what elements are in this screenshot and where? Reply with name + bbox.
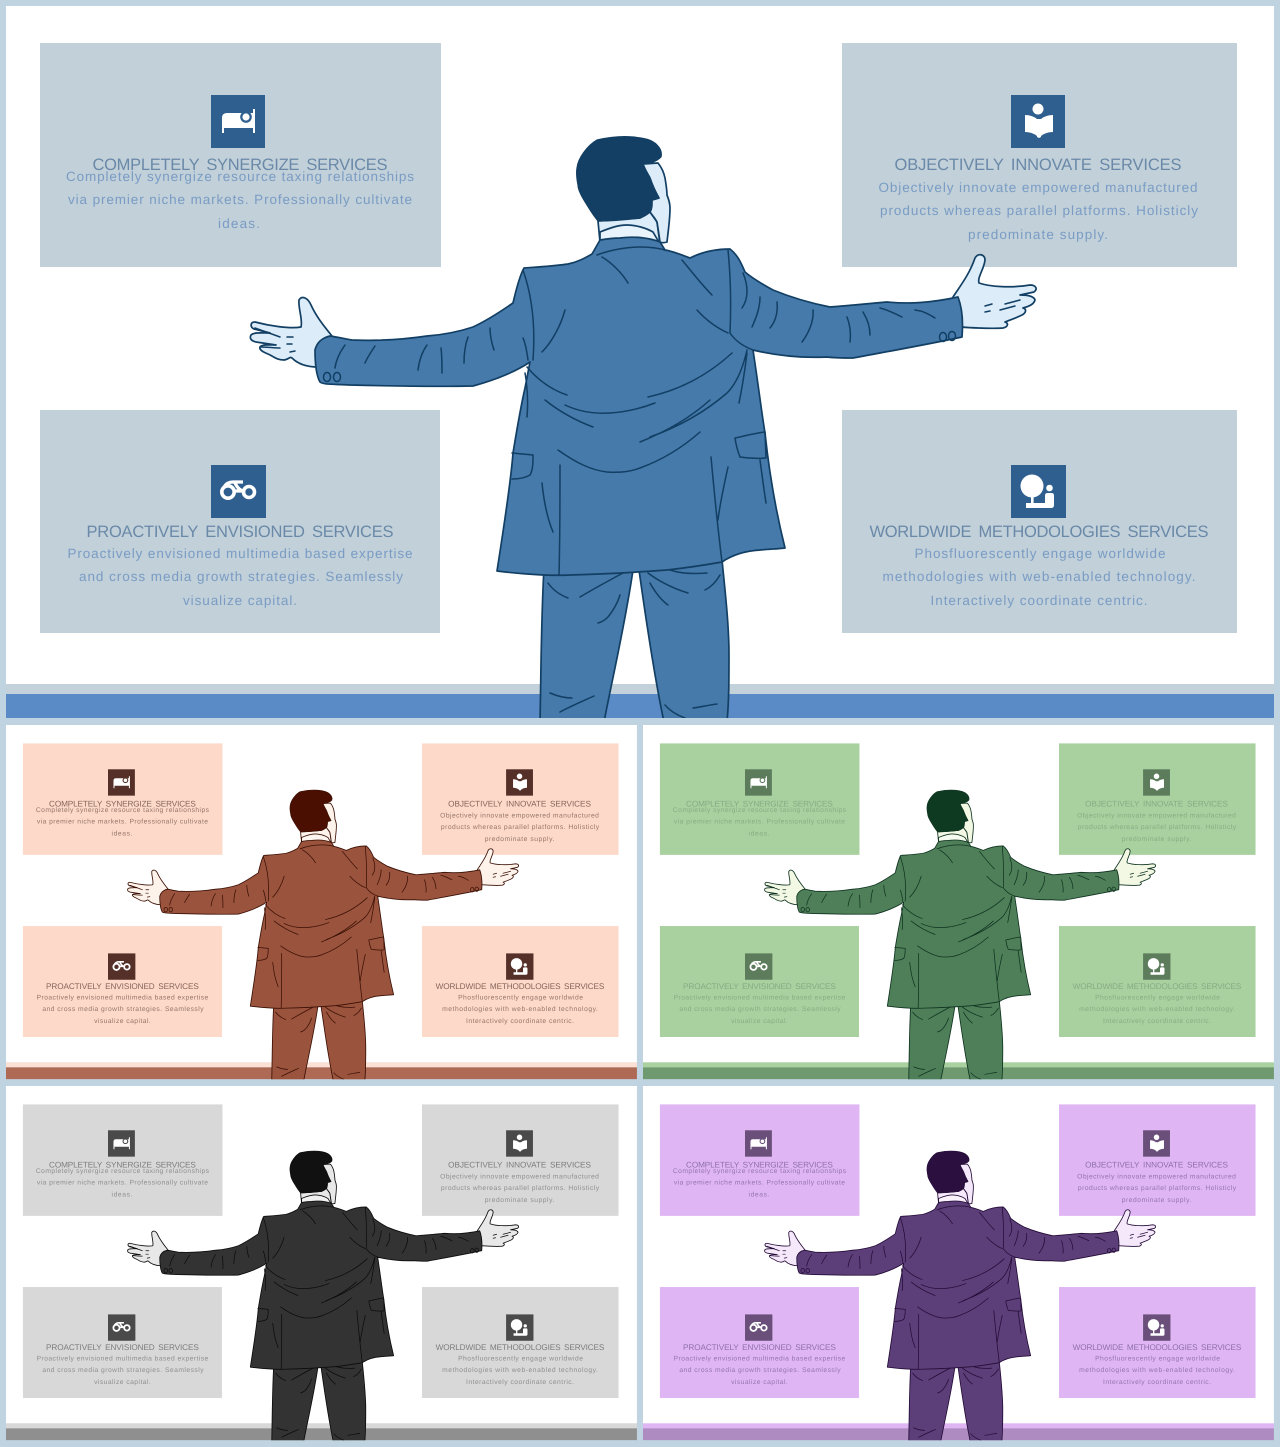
card: objectively innovate services: Objectively innovate empowered manufactured [1077, 1173, 1236, 1180]
card: objectively innovate services: Objectively innovate empowered manufactured [1077, 812, 1236, 819]
card: objectively innovate services: OBJECTIVELY INNOVATE SERVICES [1085, 1161, 1228, 1170]
card: worldwide methodologies services: Phosfluorescently engage worldwide [914, 546, 1166, 561]
card: objectively innovate services: products whereas parallel platforms. Holisticly [1078, 823, 1236, 830]
card: objectively innovate services: predominate supply. [1122, 1196, 1191, 1203]
card: worldwide methodologies services [422, 1287, 619, 1398]
figure: businessman in green suit [765, 790, 1156, 1081]
panel: purple variant slide [643, 1086, 1274, 1442]
card: completely synergize services: via premier niche markets. Professionally cultivate [674, 818, 845, 825]
card: completely synergize services: ideas. [748, 829, 769, 837]
card: objectively innovate services: products whereas parallel platforms. Holisticly [880, 203, 1198, 218]
card: worldwide methodologies services: methodologies with web-enabled technology. [882, 569, 1196, 584]
card: objectively innovate services [1059, 1104, 1256, 1216]
card: completely synergize services: COMPLETELY SYNERGIZE SERVICES [686, 800, 833, 809]
card: objectively innovate services: OBJECTIVELY INNOVATE SERVICES [1085, 800, 1228, 809]
card: completely synergize services: via premier niche markets. Professionally cultivate [674, 1179, 845, 1186]
card: completely synergize services [23, 743, 222, 855]
card: objectively innovate services [422, 1104, 619, 1216]
card: objectively innovate services: predominate supply. [485, 1196, 554, 1203]
card: objectively innovate services: Objectively innovate empowered manufactured [440, 812, 599, 819]
card: proactively envisioned services: visualize capital. [94, 1017, 151, 1025]
card: worldwide methodologies services: WORLDWIDE METHODOLOGIES SERVICES [1073, 982, 1241, 991]
card: proactively envisioned services [660, 1287, 859, 1398]
card: objectively innovate services: Objectively innovate empowered manufactured [878, 180, 1198, 195]
card: objectively innovate services: OBJECTIVELY INNOVATE SERVICES [448, 1161, 591, 1170]
card: proactively envisioned services: and cross media growth strategies. Seamlessly [679, 1005, 841, 1013]
card: proactively envisioned services: Proactively envisioned multimedia based expertise [674, 994, 845, 1001]
card: completely synergize services: COMPLETELY SYNERGIZE SERVICES [49, 800, 196, 809]
card: objectively innovate services: products whereas parallel platforms. Holisticly [441, 1184, 599, 1191]
card: worldwide methodologies services: methodologies with web-enabled technology. [442, 1366, 598, 1374]
card: completely synergize services [40, 43, 441, 267]
card: completely synergize services: Completely synergize resource taxing relationships [66, 169, 414, 184]
card: proactively envisioned services: PROACTIVELY ENVISIONED SERVICES [683, 982, 836, 991]
card: completely synergize services: Completely synergize resource taxing relationships [673, 1167, 846, 1175]
card: proactively envisioned services [23, 926, 222, 1037]
card: proactively envisioned services: and cross media growth strategies. Seamlessly [42, 1005, 204, 1013]
card: worldwide methodologies services: WORLDWIDE METHODOLOGIES SERVICES [436, 1343, 604, 1352]
figure: businessman in black suit [128, 1151, 519, 1442]
card: worldwide methodologies services: Phosfluorescently engage worldwide [458, 1355, 583, 1362]
card: proactively envisioned services: Proactively envisioned multimedia based expertise [37, 1355, 208, 1362]
card: proactively envisioned services: visualize capital. [94, 1378, 151, 1386]
card: proactively envisioned services: PROACTIVELY ENVISIONED SERVICES [46, 1343, 199, 1352]
card: proactively envisioned services [660, 926, 859, 1037]
card: completely synergize services: via premier niche markets. Professionally cultivate [37, 1179, 208, 1186]
card: completely synergize services: Completely synergize resource taxing relationships [673, 806, 846, 814]
card: objectively innovate services: OBJECTIVELY INNOVATE SERVICES [894, 156, 1182, 174]
card: objectively innovate services: products whereas parallel platforms. Holisticly [441, 823, 599, 830]
panel: blue main slide [6, 6, 1274, 722]
card: completely synergize services: COMPLETELY SYNERGIZE SERVICES [686, 1161, 833, 1170]
card: worldwide methodologies services: Interactively coordinate centric. [466, 1017, 574, 1025]
card: proactively envisioned services: and cross media growth strategies. Seamlessly [679, 1366, 841, 1374]
card: worldwide methodologies services: Interactively coordinate centric. [1103, 1378, 1211, 1386]
card: completely synergize services: COMPLETELY SYNERGIZE SERVICES [49, 1161, 196, 1170]
panel: gray variant slide [6, 1086, 637, 1442]
card: proactively envisioned services: Proactively envisioned multimedia based expertise [37, 994, 208, 1001]
card: objectively innovate services: OBJECTIVELY INNOVATE SERVICES [448, 800, 591, 809]
card: worldwide methodologies services: Interactively coordinate centric. [466, 1378, 574, 1386]
card: worldwide methodologies services: Interactively coordinate centric. [1103, 1017, 1211, 1025]
card: completely synergize services: via premier niche markets. Professionally cultivate [68, 192, 412, 207]
card: objectively innovate services: Objectively innovate empowered manufactured [440, 1173, 599, 1180]
card: completely synergize services: ideas. [218, 216, 260, 231]
card: objectively innovate services [1059, 743, 1256, 855]
panel: red variant slide [6, 725, 637, 1081]
card: worldwide methodologies services: Phosfluorescently engage worldwide [1095, 1355, 1220, 1362]
card: completely synergize services [23, 1104, 222, 1216]
figure: businessman with open arms [250, 137, 1036, 722]
card: proactively envisioned services: Proactively envisioned multimedia based expertise [674, 1355, 845, 1362]
card: worldwide methodologies services: WORLDWIDE METHODOLOGIES SERVICES [870, 523, 1208, 541]
card: worldwide methodologies services [1059, 1287, 1256, 1398]
card: objectively innovate services: predominate supply. [1122, 835, 1191, 842]
card: worldwide methodologies services: Phosfluorescently engage worldwide [1095, 994, 1220, 1001]
card: proactively envisioned services: PROACTIVELY ENVISIONED SERVICES [46, 982, 199, 991]
card: worldwide methodologies services: Phosfluorescently engage worldwide [458, 994, 583, 1001]
card: proactively envisioned services [23, 1287, 222, 1398]
panel: green variant slide [643, 725, 1274, 1081]
card: proactively envisioned services [40, 410, 440, 633]
card: worldwide methodologies services [842, 410, 1237, 633]
card: completely synergize services: Completely synergize resource taxing relationships [36, 806, 209, 814]
card: objectively innovate services [842, 43, 1237, 267]
card: proactively envisioned services: and cross media growth strategies. Seamlessly [79, 569, 403, 584]
card: objectively innovate services: predominate supply. [485, 835, 554, 842]
card: worldwide methodologies services: methodologies with web-enabled technology. [1079, 1366, 1235, 1374]
card: worldwide methodologies services: WORLDWIDE METHODOLOGIES SERVICES [1073, 1343, 1241, 1352]
card: proactively envisioned services: PROACTIVELY ENVISIONED SERVICES [683, 1343, 836, 1352]
card: proactively envisioned services: visualize capital. [183, 593, 297, 608]
figure: businessman in purple suit [765, 1151, 1156, 1442]
card: objectively innovate services [422, 743, 619, 855]
card: worldwide methodologies services: methodologies with web-enabled technology. [442, 1005, 598, 1013]
card: worldwide methodologies services: Interactively coordinate centric. [930, 593, 1148, 608]
card: proactively envisioned services: visualize capital. [731, 1378, 788, 1386]
card: worldwide methodologies services [422, 926, 619, 1037]
card: completely synergize services [660, 1104, 859, 1216]
card: proactively envisioned services: PROACTIVELY ENVISIONED SERVICES [86, 523, 394, 541]
card: worldwide methodologies services: methodologies with web-enabled technology. [1079, 1005, 1235, 1013]
card: completely synergize services: ideas. [111, 1190, 132, 1198]
card: objectively innovate services: predominate supply. [968, 227, 1108, 242]
card: objectively innovate services: products whereas parallel platforms. Holisticly [1078, 1184, 1236, 1191]
card: worldwide methodologies services [1059, 926, 1256, 1037]
card: completely synergize services: Completely synergize resource taxing relationships [36, 1167, 209, 1175]
card: proactively envisioned services: Proactively envisioned multimedia based expertise [68, 546, 412, 561]
card: completely synergize services [660, 743, 859, 855]
card: completely synergize services: via premier niche markets. Professionally cultivate [37, 818, 208, 825]
figure: businessman in brown suit [128, 790, 519, 1081]
card: proactively envisioned services: visualize capital. [731, 1017, 788, 1025]
card: completely synergize services: ideas. [748, 1190, 769, 1198]
card: completely synergize services: ideas. [111, 829, 132, 837]
card: worldwide methodologies services: WORLDWIDE METHODOLOGIES SERVICES [436, 982, 604, 991]
card: completely synergize services: COMPLETELY SYNERGIZE SERVICES [92, 156, 388, 174]
card: proactively envisioned services: and cross media growth strategies. Seamlessly [42, 1366, 204, 1374]
